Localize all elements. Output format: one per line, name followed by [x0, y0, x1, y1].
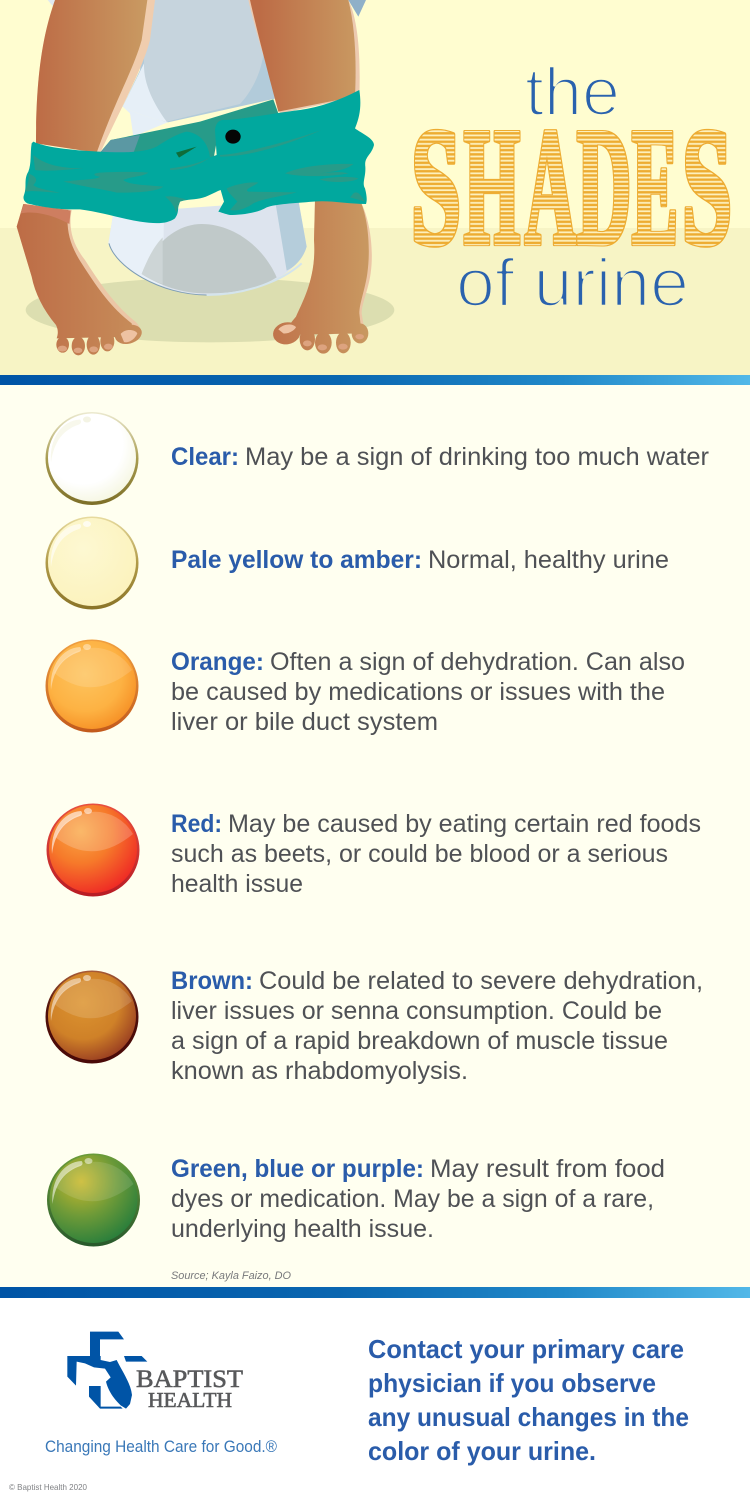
left lower leg and foot: [17, 204, 144, 355]
text: red: May be caused by eating certain red foods: [228, 810, 701, 838]
text: orange: [171, 648, 685, 736]
logo mark: cross and Florida: [67, 1332, 147, 1409]
logo: Baptist Health: HEALTH: [148, 1388, 232, 1412]
right lower leg and foot: [271, 200, 372, 354]
text: brown: liver issues or senna consumption. Could be: [171, 997, 662, 1025]
text: orange: Often a sign of dehydration. Can also: [270, 648, 685, 676]
illustration: person on toilet with shorts around ankles: [17, 0, 394, 355]
text: red: [171, 810, 701, 898]
title word: SHADES: [411, 93, 732, 280]
title word: SHADES: D: [577, 94, 631, 280]
title word: the: the: [525, 54, 620, 130]
title word: SHADES: S: [411, 95, 461, 280]
text: brown: Could be related to severe dehydration,: [259, 967, 703, 995]
title word: SHADES: A: [525, 93, 576, 280]
top gradient bar: [0, 375, 750, 385]
text: orange: be caused by medications or issues with the: [171, 678, 665, 706]
shorts: [23, 90, 374, 223]
orb: orange: [46, 640, 138, 732]
text: pale yellow to amber: [171, 546, 669, 574]
bottom gradient bar: [0, 1287, 750, 1298]
orb: clear: [46, 412, 138, 505]
copyright: © Baptist Health 2020: [9, 1482, 87, 1492]
call to action: Contact your primary care: [368, 1334, 684, 1364]
orb: red: [46, 804, 140, 896]
title word: SHADES: H: [464, 93, 520, 279]
panel: list of shades: [0, 385, 750, 1287]
title words: of urine: of urine: [456, 245, 689, 321]
orb: brown: [46, 970, 138, 1064]
text: clear: May be a sign of drinking too much water: [245, 443, 709, 471]
text: red: Red:: [171, 810, 222, 838]
text: brown: known as rhabdomyolysis.: [171, 1057, 468, 1085]
text: orange: liver or bile duct system: [171, 708, 438, 736]
right foot toes: [271, 320, 368, 354]
footer: [0, 1298, 750, 1500]
right thigh: [248, 0, 360, 113]
text: orange: Orange:: [171, 648, 264, 676]
text: green, blue or purple: [171, 1155, 665, 1243]
source note: Source; Kayla Faizo, DO: [171, 1270, 291, 1282]
text: green, blue or purple: Green, blue or purple:: [171, 1155, 424, 1183]
call to action: [368, 1334, 689, 1466]
text: pale yellow to amber: Normal, healthy urine: [428, 546, 669, 574]
text: brown: a sign of a rapid breakdown of muscle tissue: [171, 1027, 668, 1055]
title word: SHADES: E: [632, 94, 678, 280]
text: pale yellow to amber: Pale yellow to amber:: [171, 546, 422, 574]
text: clear: Clear:: [171, 443, 239, 471]
text: brown: Brown:: [171, 967, 253, 995]
orb: pale yellow: [46, 516, 138, 610]
text: green, blue or purple: underlying health issue.: [171, 1215, 434, 1243]
text: brown: [171, 967, 703, 1085]
text: red: health issue: [171, 870, 303, 898]
text: green, blue or purple: May result from food: [430, 1155, 665, 1183]
header background: [0, 0, 750, 375]
left thigh: [36, 0, 155, 153]
orb: green: [47, 1154, 140, 1246]
text: red: such as beets, or could be blood or a serious: [171, 840, 668, 868]
logo: Baptist Health: [45, 1332, 277, 1456]
call to action: any unusual changes in the: [368, 1402, 689, 1432]
call to action: color of your urine.: [368, 1436, 596, 1466]
shorts button: [225, 130, 241, 144]
tagline: Changing Health Care for Good.®: [45, 1438, 277, 1456]
title word: SHADES: S: [682, 95, 732, 280]
logo wordmark: BAPTIST: [136, 1366, 243, 1393]
title: [411, 54, 732, 321]
text: green, blue or purple: dyes or medication. May be a sign of a rare,: [171, 1185, 654, 1213]
shorts buttonhole: [176, 147, 197, 158]
toilet: [48, 0, 366, 295]
call to action: physician if you observe: [368, 1368, 656, 1398]
floor shadow: [26, 278, 394, 342]
left foot toes: [56, 322, 144, 355]
